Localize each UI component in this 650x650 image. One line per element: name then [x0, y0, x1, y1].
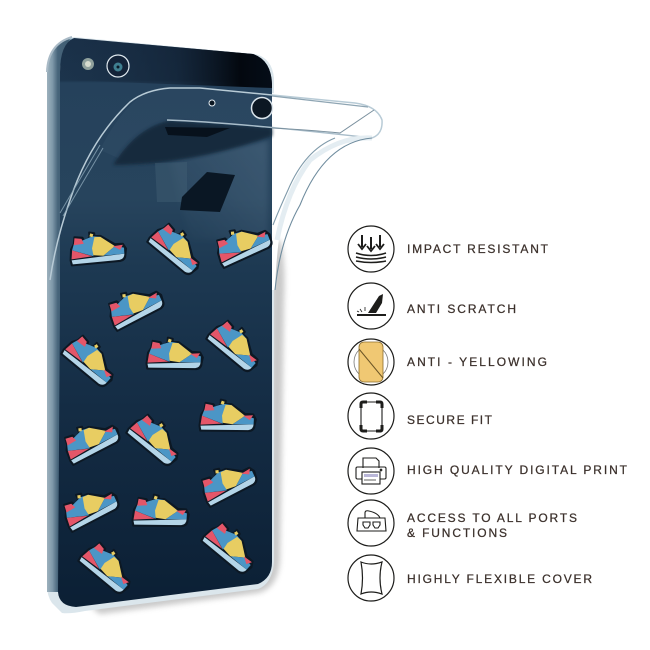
case drop shadow	[90, 240, 284, 614]
icon: blade scratching surface	[348, 283, 394, 329]
icon: ports	[348, 500, 394, 546]
feature: secure fit	[348, 393, 493, 439]
icon: case with corner bumpers	[348, 393, 394, 439]
phone back panel	[47, 37, 274, 613]
feature: high quality digital print: HIGH QUALITY DIGITAL PRINT	[407, 463, 628, 477]
feature: access to all ports and functions: ACCESS TO ALL PORTS	[407, 511, 577, 525]
feature: impact resistant: IMPACT RESISTANT	[407, 242, 549, 256]
feature: highly flexible cover	[348, 555, 592, 601]
feature: anti scratch	[348, 283, 516, 329]
feature: highly flexible cover: HIGHLY FLEXIBLE COVER	[407, 572, 592, 586]
feature: anti yellowing	[348, 339, 547, 385]
icon: printer	[348, 448, 394, 494]
feature: access to all ports and functions: & FUNCTIONS	[407, 526, 507, 540]
feature: secure fit: SECURE FIT	[407, 413, 493, 427]
feature: anti scratch: ANTI SCRATCH	[407, 302, 516, 316]
feature: anti yellowing: ANTI - YELLOWING	[407, 355, 547, 369]
camera and flash	[82, 55, 129, 77]
clear case top edge	[50, 87, 382, 290]
feature: high quality digital print	[348, 448, 628, 494]
icon: impact arrows	[348, 226, 394, 272]
icon: bent cover	[348, 555, 394, 601]
shoe pattern	[58, 217, 275, 598]
icon: yellow case crossed out	[348, 339, 394, 385]
feature: impact resistant	[348, 226, 549, 272]
feature: access to all ports and functions	[348, 500, 577, 546]
